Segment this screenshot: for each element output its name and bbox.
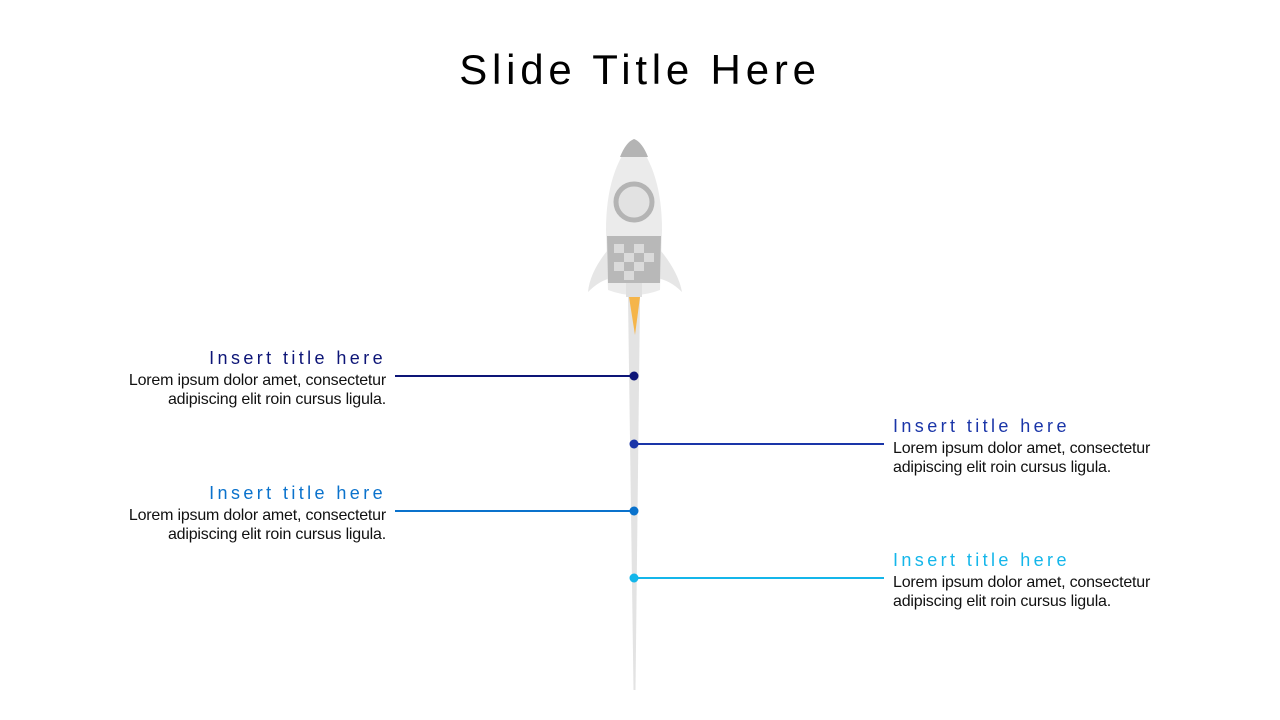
text block 1: Lorem ipsum dolor amet, consectetur xyxy=(129,372,386,389)
text block 4 xyxy=(893,550,1150,610)
icon: rocket xyxy=(588,139,682,335)
text block 3 xyxy=(129,483,386,543)
text block 4: Insert title here xyxy=(893,550,1070,570)
connector 3 xyxy=(395,506,638,516)
connector 1 xyxy=(395,372,638,380)
text block 4: adipiscing elit roin cursus ligula. xyxy=(893,593,1111,610)
text block 2 xyxy=(893,416,1150,476)
text block 4: Lorem ipsum dolor amet, consectetur xyxy=(893,574,1150,591)
text block 2: adipiscing elit roin cursus ligula. xyxy=(893,459,1111,476)
title: Slide Title Here xyxy=(459,46,821,93)
trail xyxy=(628,297,640,690)
text block 1 xyxy=(129,348,386,408)
connector 2 xyxy=(630,440,884,448)
text block 1: Insert title here xyxy=(209,348,386,368)
connector 4 xyxy=(630,574,884,582)
text block 2: Lorem ipsum dolor amet, consectetur xyxy=(893,440,1150,457)
text block 3: Lorem ipsum dolor amet, consectetur xyxy=(129,507,386,524)
text block 3: Insert title here xyxy=(209,483,386,503)
text block 2: Insert title here xyxy=(893,416,1070,436)
text block 1: adipiscing elit roin cursus ligula. xyxy=(168,391,386,408)
text block 3: adipiscing elit roin cursus ligula. xyxy=(168,526,386,543)
